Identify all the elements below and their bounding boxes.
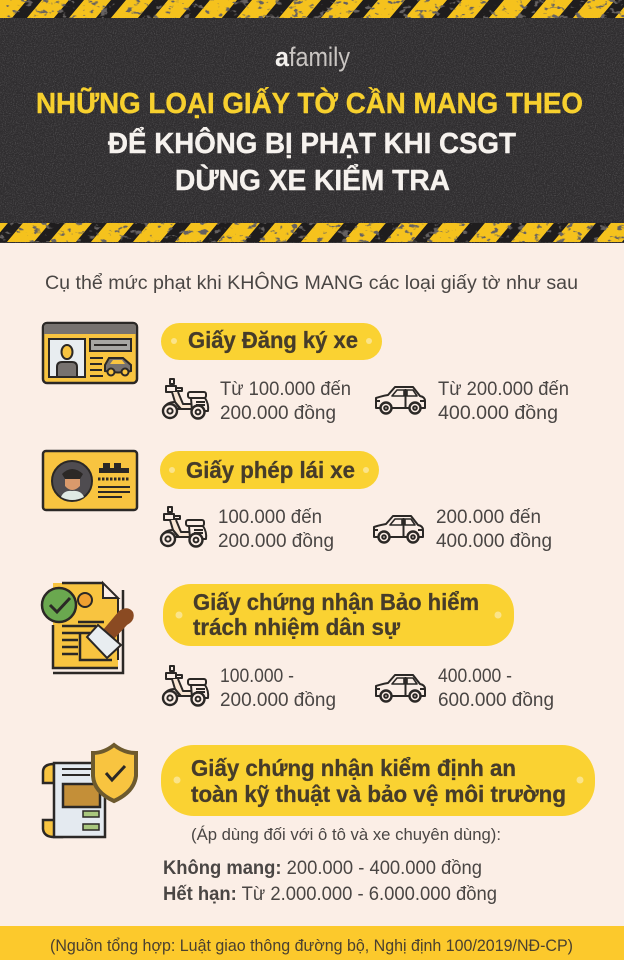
title: ĐỂ KHÔNG BỊ PHẠT KHI CSGT — [108, 126, 516, 160]
icon: scooter — [163, 666, 208, 706]
scooter fine line 2: 200.000 đồng — [218, 531, 334, 552]
note: (Áp dùng đối với ô tô và xe chuyên dùng): — [191, 825, 501, 844]
title: NHỮNG LOẠI GIẤY TỜ CẦN MANG THEO — [36, 86, 583, 120]
heading pill: Giấy chứng nhận kiểm định an — [191, 755, 516, 781]
panel: giấy đăng ký xe — [43, 323, 569, 424]
scooter fine: Từ 100.000 đến — [220, 379, 351, 400]
heading pill — [161, 745, 595, 816]
heading pill — [160, 451, 379, 489]
fine: hết hạn: Hết hạn: Từ 2.000.000 - 6.000.000 đồng — [163, 884, 497, 905]
intro text: Cụ thể mức phạt khi KHÔNG MANG các loại giấy tờ như sau — [45, 272, 578, 294]
car fine: 200.000 đến — [436, 507, 541, 528]
icon: car — [375, 675, 425, 702]
footer bar — [0, 926, 624, 960]
panel: bảo hiểm — [42, 583, 554, 711]
scooter fine line 2: 200.000 đồng — [220, 690, 336, 711]
icon: insurance document with stamp — [42, 583, 134, 673]
heading pill — [161, 323, 382, 360]
fine: không mang: Không mang: 200.000 - 400.000 đồng — [163, 858, 482, 879]
scooter fine: 100.000 đến — [218, 507, 322, 528]
hazard stripe top — [0, 0, 624, 18]
scooter fine: 100.000 - — [220, 666, 294, 687]
heading pill: Giấy chứng nhận Bảo hiểm — [193, 589, 479, 615]
car fine line 2: 400.000 đồng — [436, 531, 552, 552]
scooter fine line 2: 200.000 đồng — [220, 403, 336, 424]
icon: car — [373, 516, 423, 542]
heading pill: trách nhiệm dân sự — [193, 614, 400, 640]
source text: (Nguồn tổng hợp: Luật giao thông đường bộ, Nghị định 100/2019/NĐ-CP) — [50, 937, 573, 955]
car fine line 2: 600.000 đồng — [438, 690, 554, 711]
icon: scooter — [161, 507, 206, 546]
icon: driving licence — [43, 451, 137, 510]
logo: afamily: a — [275, 42, 290, 72]
car fine: Từ 200.000 đến — [438, 379, 569, 400]
icon: car — [375, 387, 425, 414]
logo: afamily: family — [289, 42, 350, 72]
heading pill — [163, 584, 514, 646]
heading pill: Giấy phép lái xe — [186, 457, 355, 483]
hazard stripe bottom — [0, 223, 624, 242]
title — [36, 86, 583, 197]
car fine line 2: 400.000 đồng — [438, 403, 558, 424]
title: DỪNG XE KIỂM TRA — [175, 163, 450, 197]
icon: vehicle registration card — [43, 323, 137, 383]
heading pill: Giấy Đăng ký xe — [188, 327, 358, 353]
icon: scooter — [163, 379, 208, 418]
header panel — [0, 0, 624, 243]
panel: giấy phép lái xe — [43, 451, 552, 552]
icon: inspection paper with shield — [43, 745, 136, 837]
panel: kiểm định — [43, 745, 595, 905]
heading pill: toàn kỹ thuật và bảo vệ môi trường — [191, 781, 566, 807]
car fine: 400.000 - — [438, 666, 512, 687]
